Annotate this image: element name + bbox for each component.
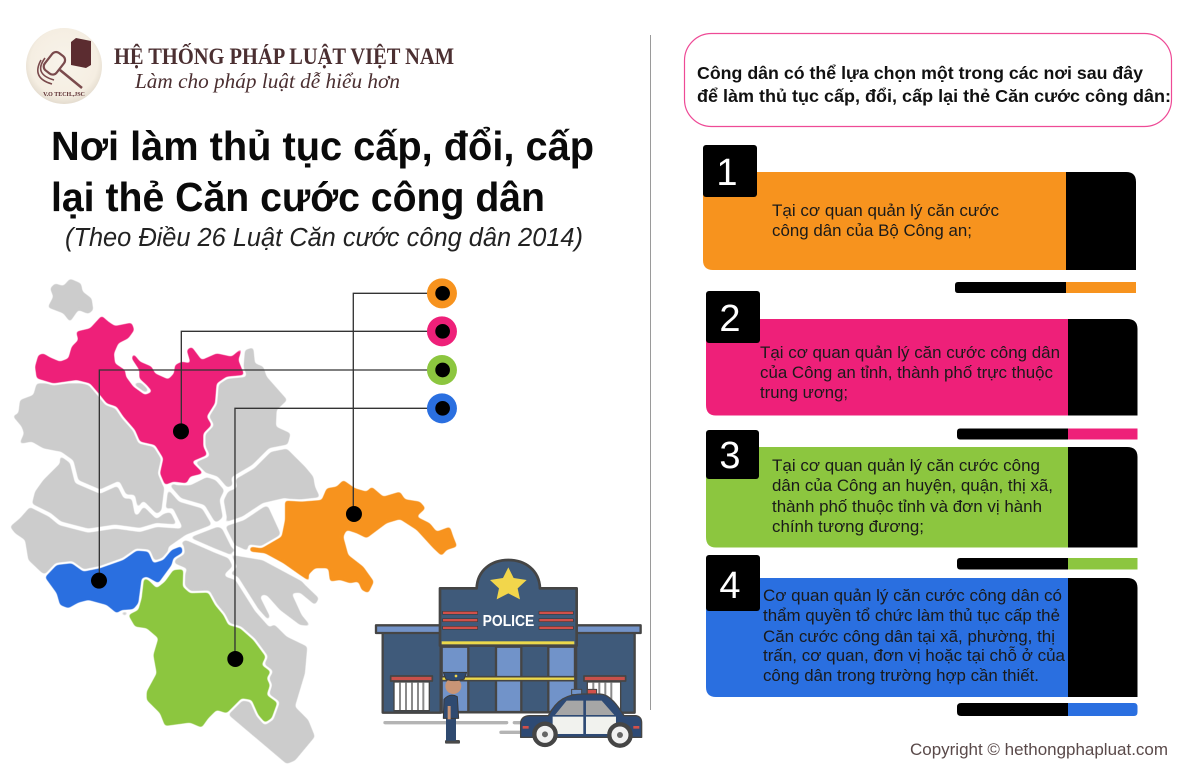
map markers	[91, 423, 362, 667]
panel: option 2: của Công an tỉnh, thành phố trực thuộc	[760, 363, 1053, 382]
icon: police station	[376, 560, 642, 746]
panel: option 3: thành phố thuộc tỉnh và đơn vị hành	[772, 497, 1042, 516]
subtitle: (Theo Điều 26 Luật Căn cước công dân 2014)	[65, 224, 583, 252]
panel: option 4: trấn, cơ quan, đơn vị hoặc tại chỗ ở của	[763, 646, 1066, 665]
panel: option 3: dân của Công an huyện, quận, thị xã,	[772, 476, 1053, 495]
panel: option 1: công dân của Bộ Công an;	[772, 221, 972, 240]
facade	[440, 560, 577, 646]
logo emblem	[26, 28, 102, 104]
panel: option 1: Tại cơ quan quản lý căn cước	[772, 201, 999, 220]
intro callout: để làm thủ tục cấp, đổi, cấp lại thẻ Căn cước công dân:	[697, 86, 1171, 106]
copyright: Copyright © hethongphapluat.com	[910, 740, 1168, 759]
map base: grey districts	[10, 347, 320, 764]
intro callout	[684, 34, 1172, 126]
panel: option 2: Tại cơ quan quản lý căn cước công dân	[760, 343, 1060, 362]
intro callout: Công dân có thể lựa chọn một trong các nơi sau đây	[697, 63, 1143, 83]
panel: option 4: Căn cước công dân tại xã, phường, thị	[763, 627, 1055, 646]
logo name: HỆ THỐNG PHÁP LUẬT VIỆT NAM	[114, 43, 454, 69]
map	[10, 278, 457, 764]
logo tagline: Làm cho pháp luật dễ hiểu hơn	[134, 69, 400, 93]
panel: option 4	[706, 555, 1138, 716]
icon: gavel	[38, 50, 82, 88]
panel: option 4: thẩm quyền tổ chức làm thủ tục cấp thẻ	[763, 606, 1060, 625]
panel: option 3	[706, 430, 1138, 570]
panel: option 3: 3	[719, 435, 741, 477]
logo ring text: V.O TECH.,JSC	[43, 92, 85, 98]
panel: option 1: 1	[716, 152, 738, 194]
icon: police car	[521, 689, 642, 746]
panel: option 4: Cơ quan quản lý căn cước công dân có	[763, 586, 1062, 605]
panel: option 2: 2	[719, 298, 741, 340]
ground lines	[385, 723, 527, 732]
panel: option 1	[703, 145, 1136, 293]
map region: pink	[35, 316, 244, 485]
police sign: POLICE	[483, 613, 534, 630]
panel: option 4: 4	[719, 565, 741, 607]
legend dots	[427, 278, 457, 423]
windows left and right	[391, 676, 626, 711]
side wings	[383, 632, 635, 713]
sign stripes	[443, 611, 573, 629]
divider	[650, 35, 652, 710]
title: Nơi làm thủ tục cấp, đổi, cấp	[51, 123, 594, 169]
title: lại thẻ Căn cước công dân	[51, 174, 545, 220]
star	[490, 567, 527, 599]
icon: police officer	[443, 672, 467, 744]
map region: orange	[250, 480, 457, 593]
map region: green	[128, 569, 277, 728]
panel: option 2	[706, 291, 1138, 440]
panel: option 3: chính tương đương;	[772, 517, 924, 536]
title	[51, 123, 594, 220]
icon: books	[71, 38, 91, 68]
panel: option 4: công dân trong trường hợp cần thiết.	[763, 666, 1039, 685]
panel: option 3: Tại cơ quan quản lý căn cước công	[772, 456, 1040, 475]
map region: blue	[45, 546, 183, 613]
central doors	[441, 646, 576, 712]
legend leader lines	[99, 293, 443, 659]
map region: island	[48, 279, 93, 322]
panel: option 2: trung ương;	[760, 383, 848, 402]
